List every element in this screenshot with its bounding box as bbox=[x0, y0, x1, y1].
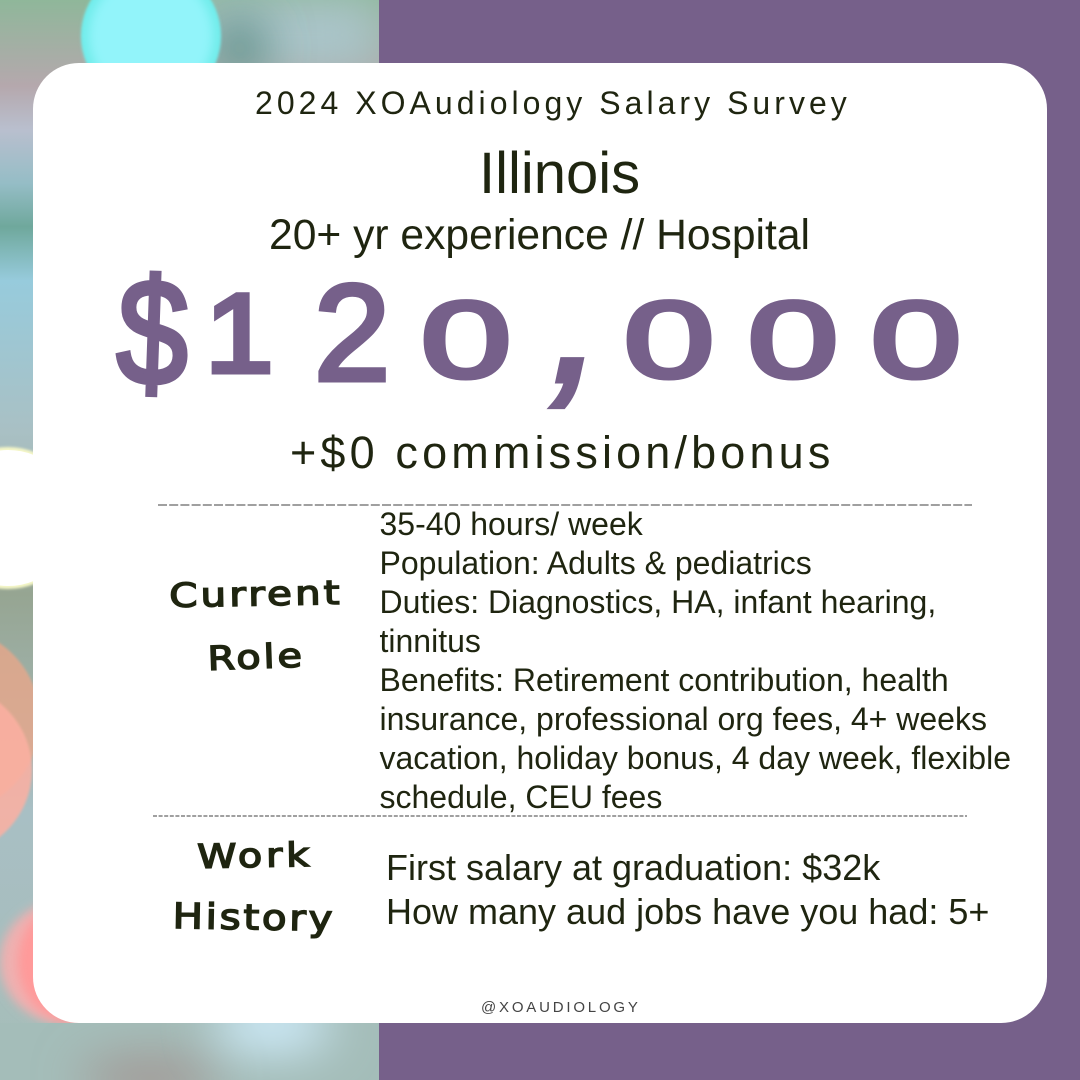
text: work history details: How many aud jobs have you had: 5+ bbox=[386, 891, 989, 932]
text: work history details: First salary at graduation: $32k bbox=[386, 847, 880, 888]
label: current role bbox=[169, 573, 343, 678]
label: work history: History bbox=[172, 897, 336, 940]
text: current role details bbox=[380, 506, 1011, 815]
text: commission and bonus: +$0 commission/bonus bbox=[290, 427, 834, 478]
footer: handle: @XOAUDIOLOGY bbox=[481, 999, 641, 1016]
salary figure: 0 bbox=[748, 279, 838, 400]
text: current role details: insurance, professional org fees, 4+ weeks bbox=[380, 701, 987, 737]
label: work history: Work bbox=[197, 835, 313, 876]
label: work history bbox=[172, 835, 336, 940]
text: current role details: tinnitus bbox=[380, 623, 481, 659]
salary figure: 0 bbox=[871, 279, 961, 400]
salary figure: 0 bbox=[421, 279, 511, 400]
text: current role details: Duties: Diagnostics, HA, infant hearing, bbox=[380, 584, 936, 620]
label: current role: Current bbox=[169, 573, 343, 615]
heading: survey title: 2024 XOAudiology Salary Survey bbox=[255, 85, 851, 121]
text: current role details: Population: Adults & pediatrics bbox=[380, 545, 812, 581]
text: current role details: Benefits: Retirement contribution, health bbox=[380, 662, 949, 698]
salary figure: $ bbox=[114, 247, 191, 417]
text: current role details: 35-40 hours/ week bbox=[380, 506, 643, 542]
background: bokeh photo panel bbox=[0, 0, 379, 1080]
text: current role details: schedule, CEU fees bbox=[380, 779, 662, 815]
salary figure: , bbox=[530, 201, 633, 424]
text: work history details bbox=[386, 847, 989, 932]
salary figure: 0 bbox=[624, 279, 714, 400]
text: current role details: vacation, holiday bonus, 4 day week, flexible bbox=[380, 740, 1011, 776]
subheading: experience and setting: 20+ yr experience // Hospital bbox=[269, 211, 810, 259]
salary figure: 1 bbox=[205, 271, 274, 396]
label: current role: Role bbox=[207, 636, 306, 678]
heading: state: Illinois bbox=[479, 141, 640, 206]
salary figure: 2 bbox=[314, 257, 390, 410]
